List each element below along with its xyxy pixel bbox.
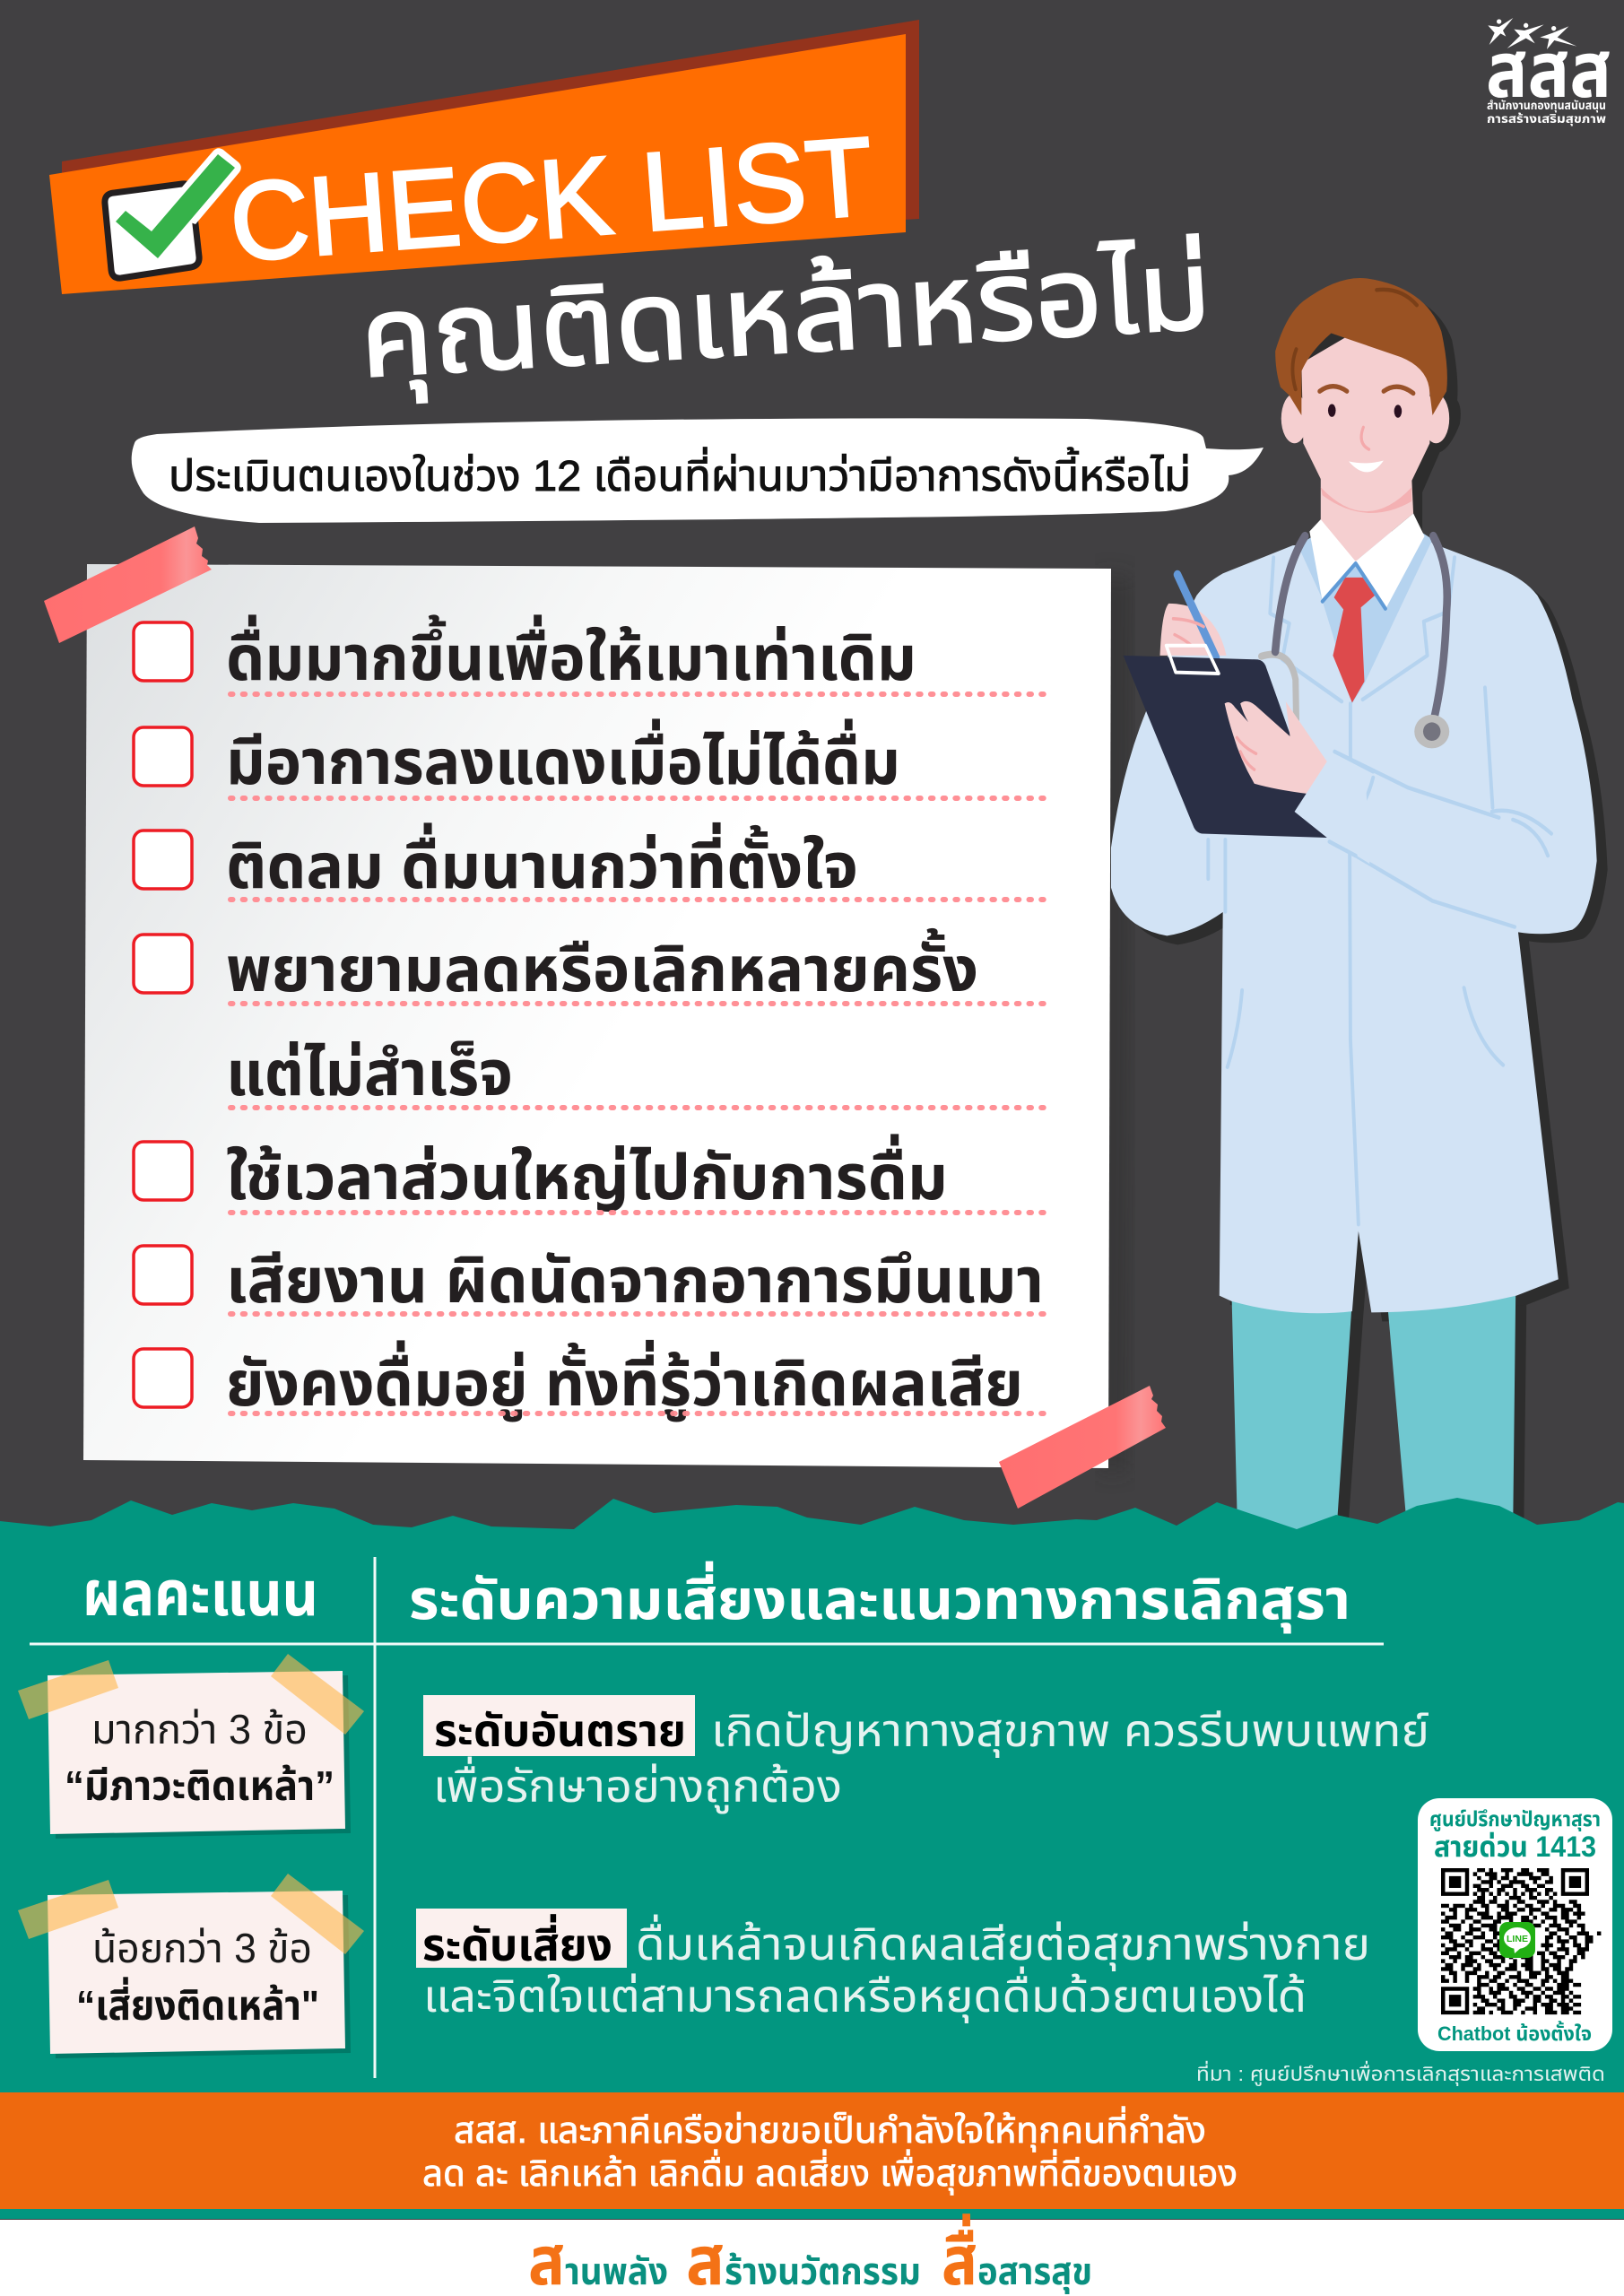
speech bubble text: ประเมินตนเองในช่วง 12 เดือนที่ผ่านมาว่ามีอาการดังนี้หรือไม่	[169, 447, 1191, 500]
risk column heading: ระดับความเสี่ยงและแนวทางการเลิกสุรา	[409, 1561, 1350, 1633]
danger level text: เกิดปัญหาทางสุขภาพ ควรรีบพบแพทย์	[711, 1706, 1429, 1758]
pen and upper hand	[1160, 575, 1227, 657]
note: fewer than 3 items: น้อยกว่า 3 ข้อ	[92, 1925, 312, 1971]
note: more than 3 items: มากกว่า 3 ข้อ	[91, 1706, 308, 1752]
checklist items: ยังคงดื่มอยู่ ทั้งที่รู้ว่าเกิดผลเสีย	[226, 1340, 1023, 1422]
checklist items: เสียงาน ผิดนัดจากอาการมึนเมา	[226, 1246, 1044, 1316]
checklist items: แต่ไม่สำเร็จ	[226, 1039, 513, 1109]
banner heading: CHECK LIST	[226, 115, 877, 285]
lower hand	[1225, 701, 1327, 794]
table rules	[30, 1557, 1384, 2078]
checklist items	[226, 614, 1044, 1422]
neck	[1321, 475, 1413, 561]
white footer	[0, 2220, 1624, 2296]
risk level text	[416, 1909, 1370, 2023]
danger level text	[423, 1695, 1429, 1813]
checklist items: ใช้เวลาส่วนใหญ่ไปกับการดื่ม	[226, 1134, 948, 1213]
coat seams	[1208, 557, 1551, 1224]
panel: check list paper	[83, 564, 1111, 1468]
footer message band	[0, 2092, 1624, 2209]
tape: top left	[44, 526, 212, 643]
score column heading: ผลคะแนน	[83, 1559, 318, 1629]
source note: ที่มา : ศูนย์ปรึกษาเพื่อการเลิกสุราและการเสพติด	[1196, 2060, 1605, 2086]
paper shadow	[1099, 574, 1132, 1471]
collar and tie	[1309, 513, 1425, 703]
QR card: Chatbot น้องตั้งใจ	[1437, 2021, 1592, 2045]
speech bubble	[132, 418, 1264, 523]
checkboxes	[134, 622, 192, 1407]
danger level text: ระดับอันตราย	[434, 1706, 686, 1756]
panel: green results section	[0, 1498, 1624, 2219]
danger level text: เพื่อรักษาอย่างถูกต้อง	[433, 1756, 842, 1813]
checklist items: ดื่มมากขึ้นเพื่อให้เมาเท่าเดิม	[226, 614, 916, 693]
clipboard	[1124, 646, 1327, 838]
slogan	[528, 2213, 1092, 2296]
doctor shadow	[1122, 287, 1608, 1541]
tape: bottom right	[999, 1386, 1166, 1509]
footer message band: ลด ละ เลิกเหล้า เลิกดื่ม ลดเสี่ยง เพื่อสุขภาพที่ดีของตนเอง	[422, 2149, 1238, 2195]
note: fewer than 3 items: “เสี่ยงติดเหล้า"	[76, 1977, 319, 2029]
icon: LINE	[1499, 1922, 1535, 1958]
stethoscope	[1262, 536, 1449, 748]
doctor illustration	[1111, 278, 1597, 1532]
icon: LINE: LINE	[1507, 1935, 1528, 1944]
checklist items: มีอาการลงแดงเมื่อไม่ได้ดื่ม	[226, 718, 900, 797]
footer message band: สสส. และภาคีเครือข่ายขอเป็นกำลังใจให้ทุกคนที่กำลัง	[454, 2106, 1206, 2152]
icon: green check box	[105, 148, 241, 278]
risk level text: ระดับเสี่ยง	[422, 1914, 612, 1970]
risk level text: ดื่มเหล้าจนเกิดผลเสียต่อสุขภาพร่างกาย	[636, 1914, 1370, 1971]
doctor shirt	[1298, 531, 1432, 703]
checklist items: ติดลม ดื่มนานกว่าที่ตั้งใจ	[226, 822, 858, 901]
note: fewer than 3 items	[18, 1874, 364, 2058]
QR card: ศูนย์ปรึกษาปัญหาสุรา	[1429, 1807, 1601, 1831]
logo: thaihealth: สสส	[1486, 28, 1611, 114]
banner: check list	[49, 20, 919, 294]
coat cuff	[1295, 761, 1369, 864]
doctor head	[1275, 278, 1449, 505]
QR card: สายด่วน 1413	[1434, 1831, 1596, 1863]
slogan: อสารสุข	[977, 2250, 1092, 2294]
slogan: านพลัง	[565, 2250, 668, 2292]
risk level text: และจิตใจแต่สามารถลดหรือหยุดดื่มด้วยตนเองได้	[423, 1966, 1307, 2023]
dotted lines	[230, 694, 1051, 1413]
title: คุณติดเหล้าหรือไม่	[357, 228, 1214, 405]
logo: thaihealth: การสร้างเสริมสุขภาพ	[1487, 112, 1607, 126]
note: more than 3 items: “มีภาวะติดเหล้า”	[65, 1762, 334, 1809]
slogan: ร้างนวัตกรรม	[725, 2250, 921, 2292]
QR code	[1441, 1868, 1601, 2014]
note: more than 3 items	[18, 1654, 364, 1839]
checklist items: พยายามลดหรือเลิกหลายครั้ง	[226, 927, 978, 1004]
logo: thaihealth: สำนักงานกองทุนสนับสนุน	[1487, 99, 1606, 112]
QR card	[1418, 1798, 1612, 2051]
doctor trousers	[1231, 1288, 1515, 1532]
doctor coat	[1111, 539, 1597, 1313]
